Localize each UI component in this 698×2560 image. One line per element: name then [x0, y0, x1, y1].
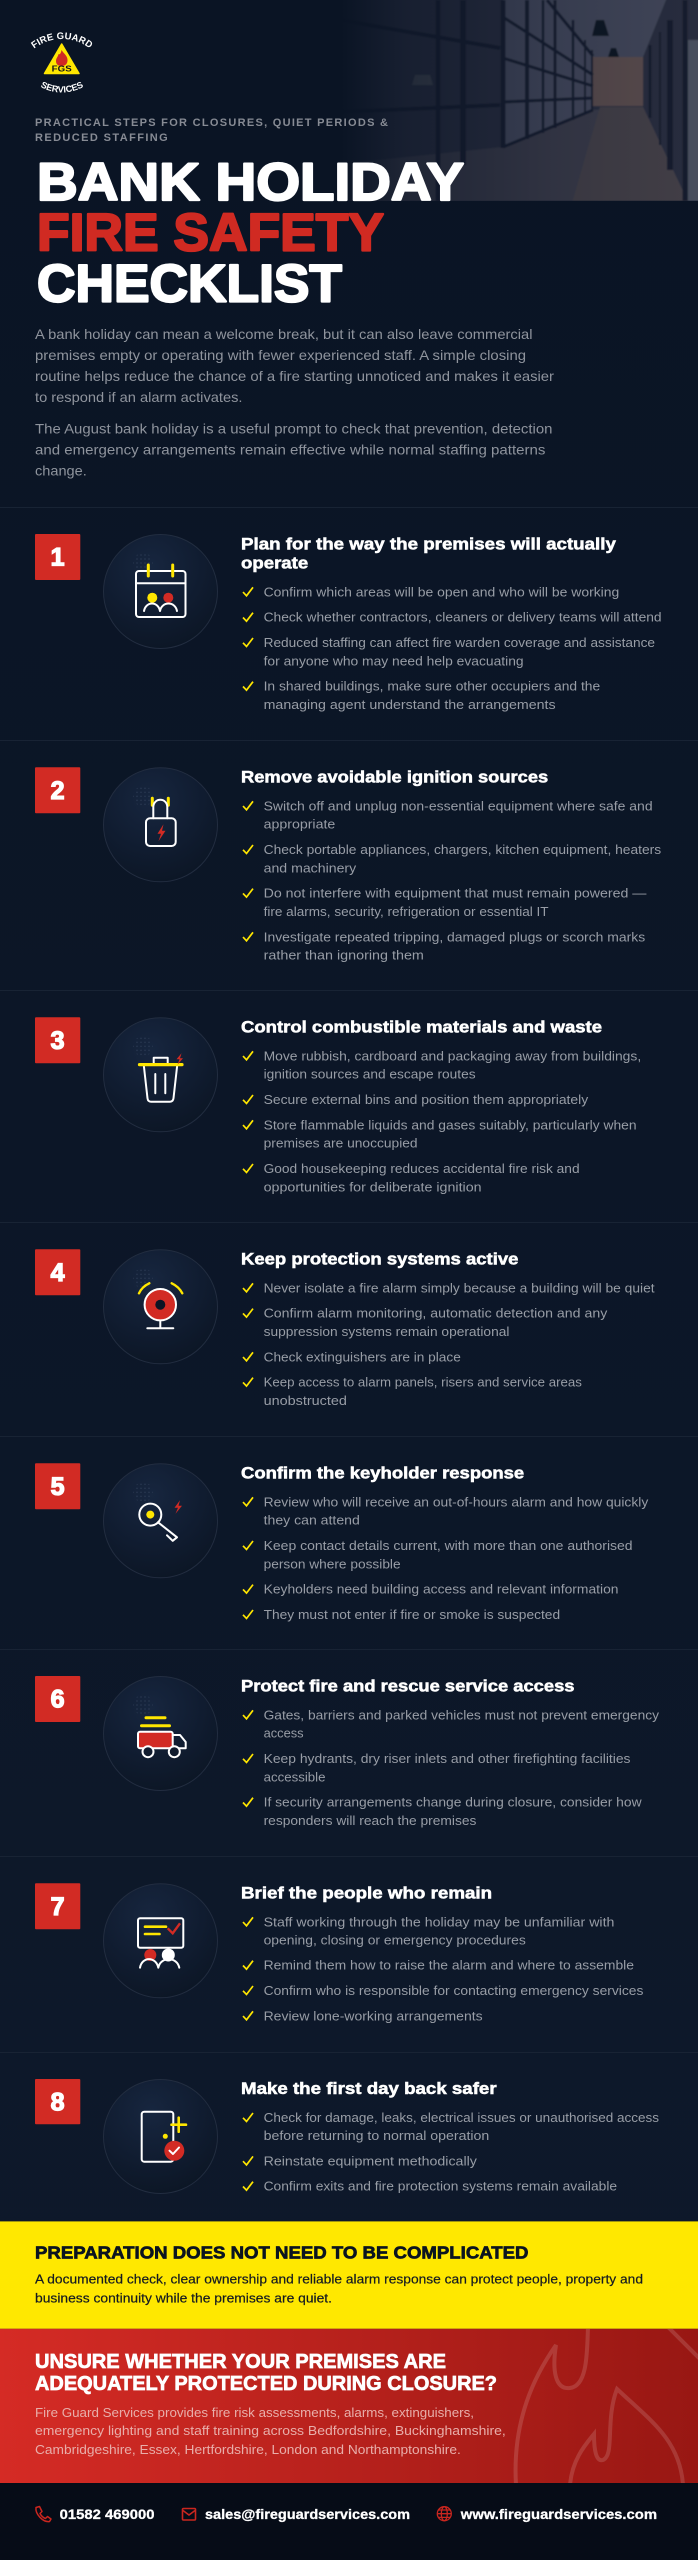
number badge 3: 3 — [51, 1027, 65, 1055]
contact: phone: 01582 469000 — [60, 2506, 155, 2522]
checklist: before returning to normal operation — [264, 2129, 489, 2143]
number badge 4 — [35, 1249, 80, 1295]
contact: website: www.fireguardservices.com — [460, 2506, 657, 2522]
title: CHECKLIST — [37, 254, 342, 314]
icon: mail — [182, 2508, 196, 2520]
icon: padlock with bolt — [104, 768, 218, 882]
checklist: Keep access to alarm panels, risers and service areas — [264, 1376, 582, 1390]
intro text: and emergency arrangements remain effective while normal staffing patterns — [35, 441, 545, 457]
title: BANK HOLIDAY — [37, 153, 464, 212]
checklist — [243, 1915, 643, 2023]
intro text: The August bank holiday is a useful prompt to check that prevention, detection — [35, 420, 552, 436]
number badge 4: 4 — [51, 1259, 65, 1287]
red panel text: Cambridgeshire, Essex, Hertfordshire, London and Northamptonshire. — [35, 2442, 461, 2457]
red panel heading — [35, 2350, 497, 2395]
checklist: Check for damage, leaks, electrical issues or unauthorised access — [264, 2111, 659, 2125]
heading: Plan for the way the premises will actually — [241, 535, 617, 553]
intro text — [35, 326, 554, 478]
title: FIRE SAFETY — [37, 204, 384, 263]
checklist: Reinstate equipment methodically — [264, 2154, 478, 2168]
checklist: In shared buildings, make sure other occupiers and the — [264, 680, 600, 694]
checklist: opportunities for deliberate ignition — [264, 1180, 482, 1194]
checklist: appropriate — [264, 818, 335, 832]
red panel heading: UNSURE WHETHER YOUR PREMISES ARE — [35, 2350, 446, 2373]
checklist — [243, 1495, 649, 1622]
logo: Fire Guard Services — [30, 32, 92, 92]
number badge 6: 6 — [51, 1686, 65, 1714]
icon: key — [104, 1464, 218, 1578]
logo: Fire Guard Services: SERVICES — [41, 82, 83, 92]
number badge 5 — [35, 1463, 80, 1509]
panel: step 4 — [35, 1249, 655, 1408]
icon: alarm sounder — [104, 1250, 218, 1364]
checklist — [243, 799, 661, 963]
checklist: Switch off and unplug non-essential equipment where safe and — [264, 799, 653, 813]
number badge 6 — [35, 1676, 80, 1722]
number badge 3 — [35, 1017, 80, 1063]
checklist: premises are unoccupied — [264, 1137, 418, 1151]
eyebrow — [35, 117, 388, 144]
checklist: Store flammable liquids and gases suitably, particularly when — [264, 1118, 637, 1132]
checklist: Confirm which areas will be open and who will be working — [264, 585, 619, 599]
heading: Make the first day back safer — [241, 2080, 497, 2098]
heading: Control combustible materials and waste — [241, 1019, 602, 1037]
checklist: Keep hydrants, dry riser inlets and other firefighting facilities — [264, 1752, 630, 1766]
heading: Protect fire and rescue service access — [241, 1677, 574, 1695]
checklist: ignition sources and escape routes — [264, 1068, 476, 1082]
callout heading: PREPARATION DOES NOT NEED TO BE COMPLICATED — [35, 2243, 528, 2263]
checklist: Gates, barriers and parked vehicles must not prevent emergency — [264, 1708, 660, 1722]
checklist: Confirm alarm monitoring, automatic detection and any — [264, 1307, 608, 1321]
checklist: Review lone-working arrangements — [264, 2009, 483, 2023]
checklist: Review who will receive an out-of-hours alarm and how quickly — [264, 1495, 649, 1509]
checklist: If security arrangements change during closure, consider how — [264, 1796, 643, 1810]
checklist: Remind them how to raise the alarm and where to assemble — [264, 1959, 634, 1973]
checklist: Keep contact details current, with more than one authorised — [264, 1539, 633, 1553]
number badge 2 — [35, 767, 80, 813]
checklist: Move rubbish, cardboard and packaging away from buildings, — [264, 1049, 641, 1063]
intro text: routine helps reduce the chance of a fire starting unnoticed and makes it easier — [35, 368, 554, 384]
icon: waste bin — [104, 1018, 218, 1132]
icon: briefing board and people — [104, 1884, 218, 1998]
heading: Brief the people who remain — [241, 1885, 492, 1903]
red panel text — [35, 2405, 506, 2457]
checklist: unobstructed — [264, 1394, 347, 1408]
checklist: rather than ignoring them — [264, 949, 424, 963]
panel: step 1 — [35, 534, 662, 712]
number badge 5: 5 — [51, 1473, 65, 1501]
icon: globe — [437, 2507, 451, 2521]
checklist: person where possible — [264, 1557, 401, 1571]
callout text: business continuity while the premises are quiet. — [35, 2290, 332, 2306]
heading: Confirm the keyholder response — [241, 1465, 524, 1483]
intro text: A bank holiday can mean a welcome break, but it can also leave commercial — [35, 326, 532, 342]
heading: Remove avoidable ignition sources — [241, 769, 548, 787]
number badge 1 — [35, 534, 80, 580]
number badge 1: 1 — [51, 544, 65, 572]
red panel text: emergency lighting and staff training across Bedfordshire, Buckinghamshire, — [35, 2423, 506, 2438]
panel: step 8 — [35, 2079, 659, 2194]
callout text — [35, 2271, 643, 2306]
footer contact bar — [0, 2483, 698, 2560]
checklist: Keyholders need building access and relevant information — [264, 1583, 619, 1597]
checklist: fire alarms, security, refrigeration or essential IT — [264, 905, 549, 919]
logo: Fire Guard Services: FGS — [52, 64, 72, 74]
checklist: and machinery — [264, 861, 357, 875]
logo: Fire Guard Services: FIRE GUARD — [30, 32, 92, 48]
checklist: for anyone who may need help evacuating — [264, 654, 524, 668]
number badge 7: 7 — [51, 1893, 65, 1921]
checklist: opening, closing or emergency procedures — [264, 1934, 526, 1948]
checklist: responders will reach the premises — [264, 1814, 476, 1828]
header photo: office corridor — [330, 0, 698, 210]
intro text: to respond if an alarm activates. — [35, 389, 242, 405]
panel: step 3 — [35, 1017, 641, 1194]
checklist: Check portable appliances, chargers, kitchen equipment, heaters — [264, 843, 661, 857]
checklist: Never isolate a fire alarm simply because a building will be quiet — [264, 1281, 655, 1295]
contact: email: sales@fireguardservices.com — [205, 2506, 410, 2522]
checklist — [243, 1708, 660, 1828]
intro text: change. — [35, 462, 87, 478]
checklist: Check whether contractors, cleaners or delivery teams will attend — [264, 611, 662, 625]
intro text: premises empty or operating with fewer experienced staff. A simple closing — [35, 347, 526, 363]
icon: calendar with people — [104, 534, 218, 648]
checklist: Confirm who is responsible for contacting emergency services — [264, 1984, 643, 1998]
eyebrow: PRACTICAL STEPS FOR CLOSURES, QUIET PERIODS & — [35, 117, 388, 129]
checklist: Reduced staffing can affect fire warden coverage and assistance — [264, 636, 655, 650]
checklist: Check extinguishers are in place — [264, 1350, 461, 1364]
panel: step 6 — [35, 1676, 660, 1828]
red panel heading: ADEQUATELY PROTECTED DURING CLOSURE? — [35, 2372, 497, 2395]
icon: fire vehicle — [104, 1676, 218, 1790]
number badge 8 — [35, 2079, 80, 2124]
checklist — [243, 2111, 659, 2194]
panel: red call to action — [0, 2327, 698, 2485]
icon: door with check — [104, 2080, 218, 2194]
checklist: managing agent understand the arrangements — [264, 698, 556, 712]
checklist: Secure external bins and position them appropriately — [264, 1093, 589, 1107]
number badge 8: 8 — [51, 2089, 65, 2117]
flame outline watermark — [516, 2327, 698, 2485]
heading: operate — [241, 554, 308, 572]
panel: step 5 — [35, 1463, 649, 1622]
checklist — [243, 585, 662, 712]
panel: step 2 — [35, 767, 661, 963]
heading: Keep protection systems active — [241, 1251, 518, 1269]
checklist: suppression systems remain operational — [264, 1325, 509, 1339]
number badge 2: 2 — [51, 777, 65, 805]
checklist: Staff working through the holiday may be unfamiliar with — [264, 1915, 614, 1929]
checklist: Investigate repeated tripping, damaged plugs or scorch marks — [264, 930, 645, 944]
checklist: access — [264, 1727, 304, 1741]
checklist: Confirm exits and fire protection systems remain available — [264, 2180, 617, 2194]
eyebrow: REDUCED STAFFING — [35, 132, 168, 144]
checklist — [243, 1281, 655, 1408]
number badge 7 — [35, 1883, 80, 1929]
red panel text: Fire Guard Services provides fire risk assessments, alarms, extinguishers, — [35, 2405, 474, 2420]
panel: yellow callout — [0, 2221, 698, 2329]
checklist: accessible — [264, 1770, 326, 1784]
checklist: they can attend — [264, 1514, 360, 1528]
checklist: Good housekeeping reduces accidental fire risk and — [264, 1162, 580, 1176]
checklist: Do not interfere with equipment that must remain powered — — [264, 887, 647, 901]
checklist: They must not enter if fire or smoke is suspected — [264, 1608, 560, 1622]
heading — [241, 535, 617, 572]
panel: step 7 — [35, 1883, 643, 2023]
callout text: A documented check, clear ownership and reliable alarm response can protect people, property and — [35, 2271, 643, 2286]
checklist — [243, 1049, 641, 1194]
title — [37, 153, 464, 314]
icon: phone — [36, 2506, 51, 2522]
